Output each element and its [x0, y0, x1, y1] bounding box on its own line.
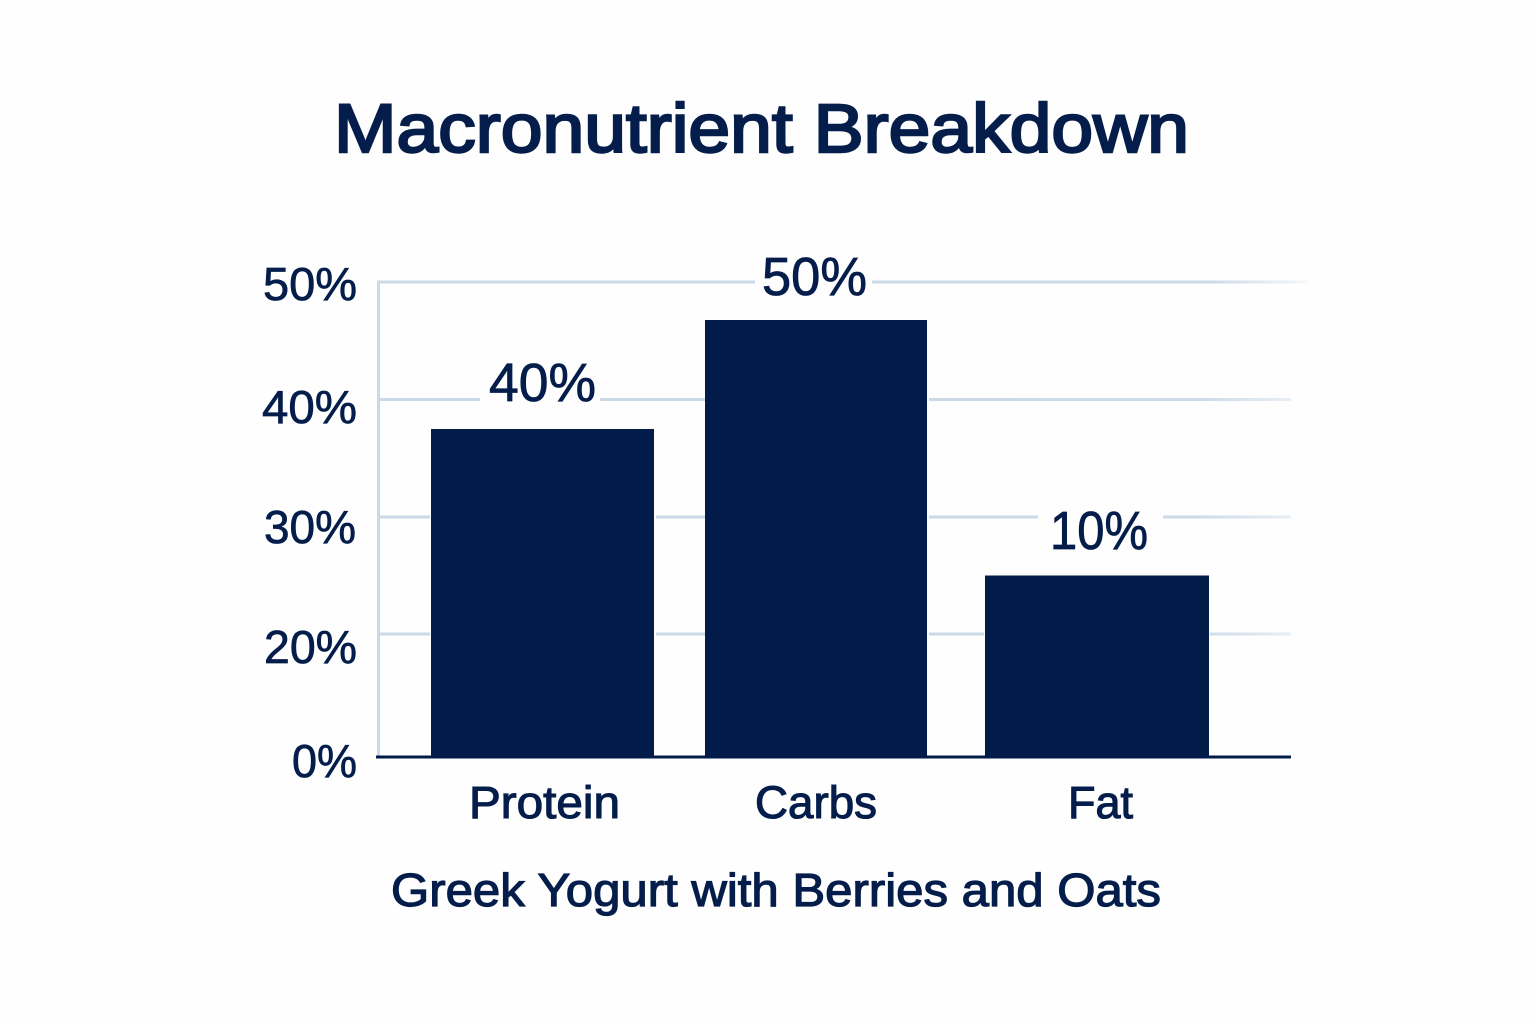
bar chart — [262, 247, 1308, 828]
x-axis line — [376, 756, 1291, 758]
category label: Protein: Protein — [469, 777, 620, 828]
y-axis labels: 20% — [264, 621, 357, 673]
y-axis line — [377, 281, 380, 757]
title: Macronutrient Breakdown — [334, 90, 1189, 167]
y-axis labels: 50% — [263, 258, 357, 310]
category label: Carbs: Carbs — [755, 777, 877, 828]
y-axis labels: 40% — [262, 381, 357, 433]
bar: Carbs — [705, 320, 927, 757]
value label: Fat 10%: 10% — [1050, 501, 1148, 561]
gridlines — [377, 280, 1308, 636]
value label: Protein 40%: 40% — [489, 353, 596, 413]
category label: Fat: Fat — [1068, 777, 1133, 828]
bar: Protein — [431, 429, 654, 757]
y-axis labels: 30% — [264, 501, 356, 553]
bar: Fat — [985, 576, 1209, 757]
y-axis labels — [262, 258, 357, 787]
value label: Carbs 50%: 50% — [762, 247, 867, 307]
y-axis labels: 0% — [292, 735, 357, 787]
subtitle: Greek Yogurt with Berries and Oats — [391, 864, 1161, 916]
